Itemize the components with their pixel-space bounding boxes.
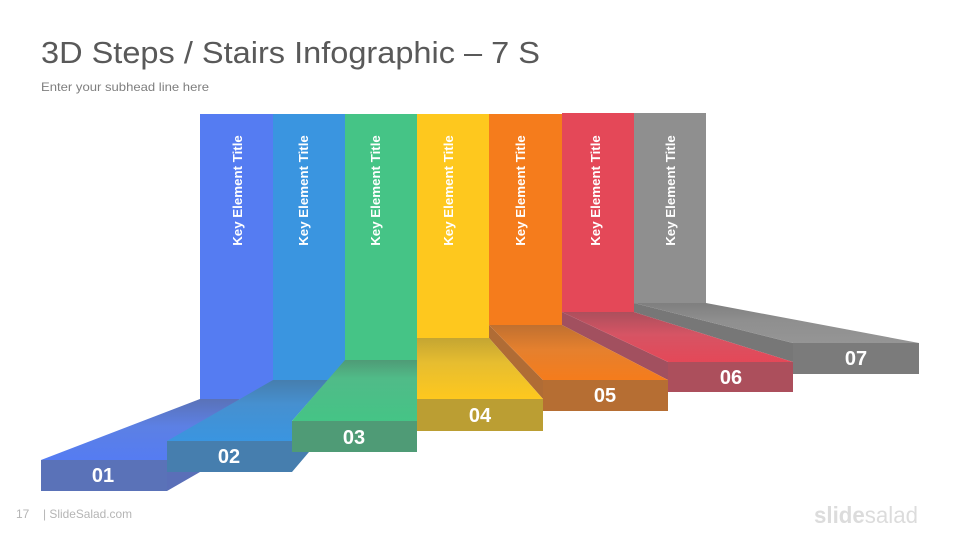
step 06: 06 [720,367,742,389]
step 05 [489,114,668,411]
step 07: 07 [845,348,867,370]
step 01: Key Element Title [230,135,245,246]
step 01: 01 [92,465,114,487]
step 01 [41,114,273,491]
step 07 [634,113,919,374]
step 03: Key Element Title [368,135,383,246]
step 04: 04 [469,405,492,427]
step 06 [562,113,793,392]
step 02 [167,114,345,472]
step 05: Key Element Title [513,135,528,246]
title: 3D Steps / Stairs Infographic – 7 S [41,35,540,70]
step 04 [417,114,543,431]
step 02: Key Element Title [296,135,311,246]
logo: slidesalad [814,502,918,528]
step 04: Key Element Title [441,135,456,246]
step 03 [292,114,417,452]
step 05: 05 [594,385,616,407]
step 03: 03 [343,427,365,449]
step 02: 02 [218,446,240,468]
subhead: Enter your subhead line here [41,80,209,94]
step 06: Key Element Title [588,135,603,246]
page number: 17 [16,507,30,521]
footer text: | SlideSalad.com [43,507,132,521]
step 07: Key Element Title [663,135,678,246]
